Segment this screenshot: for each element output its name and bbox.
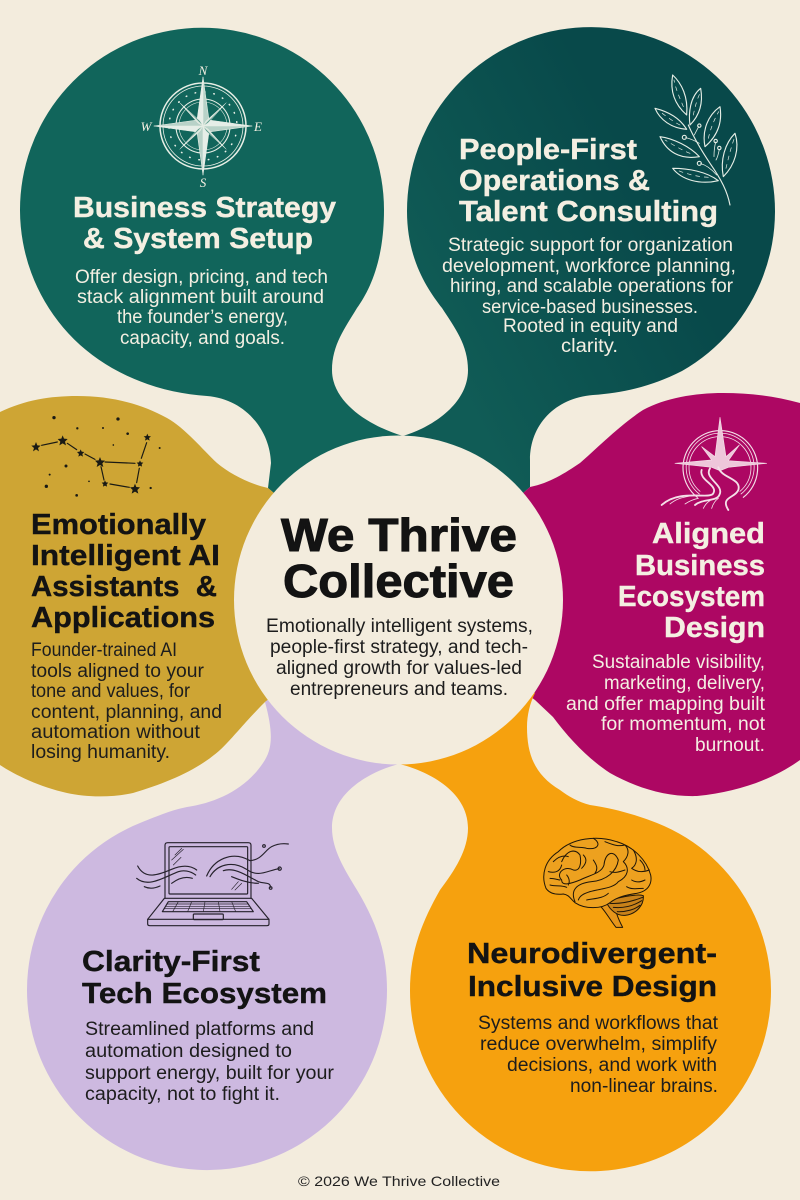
text block — [75, 267, 328, 349]
heading: Inclusive Design — [468, 971, 717, 1003]
heading — [459, 134, 718, 228]
text block: capacity, and goals. — [120, 328, 285, 349]
text block: hiring, and scalable operations for — [450, 276, 734, 297]
panel: center hub — [234, 436, 563, 764]
text block: service-based businesses. — [482, 297, 698, 318]
text block — [31, 640, 222, 763]
heading — [73, 192, 336, 255]
heading — [618, 518, 765, 644]
compass letters: E — [253, 119, 262, 134]
tagline: Emotionally intelligent systems, — [266, 616, 533, 637]
text block: content, planning, and — [31, 702, 222, 723]
heading: Operations & — [459, 165, 650, 197]
text block: Offer design, pricing, and tech — [75, 267, 328, 288]
compass letters: S — [200, 175, 207, 190]
title: We Thrive — [281, 509, 517, 561]
title: Collective — [283, 555, 514, 607]
text block — [85, 1019, 335, 1105]
tagline: aligned growth for values-led — [276, 658, 522, 679]
heading: Tech Ecosystem — [82, 978, 327, 1010]
dark teal blob — [400, 27, 775, 600]
heading — [31, 509, 220, 634]
gold blob — [0, 396, 400, 796]
compass letters: N — [198, 63, 209, 78]
icon: compass — [154, 77, 252, 175]
text block: tools aligned to your — [31, 661, 205, 682]
panel: aligned business ecosystem — [400, 393, 800, 796]
text block: Strategic support for organization — [448, 235, 733, 256]
heading: Neurodivergent- — [467, 938, 717, 970]
compass letters — [141, 63, 262, 190]
lilac blob — [27, 600, 400, 1170]
text block: Streamlined platforms and — [85, 1019, 314, 1040]
icon: laptop — [137, 843, 288, 926]
text block: for momentum, not — [601, 714, 766, 735]
tagline: entrepreneurs and teams. — [290, 679, 508, 700]
text block: clarity. — [561, 336, 618, 357]
text block: burnout. — [695, 735, 765, 756]
heading: Ecosystem — [618, 581, 765, 613]
teal blob — [20, 28, 403, 600]
text block: reduce overwhelm, simplify — [480, 1034, 718, 1055]
icon: constellation — [31, 416, 161, 497]
text block — [478, 1013, 719, 1097]
text block: automation designed to — [85, 1041, 292, 1062]
text block: and offer mapping built — [566, 694, 766, 715]
panel: emotionally intelligent AI — [0, 396, 400, 796]
heading: Design — [664, 612, 765, 644]
icon: compass and river — [662, 417, 767, 510]
text block: losing humanity. — [31, 742, 170, 763]
heading — [82, 946, 327, 1010]
heading: Business Strategy — [73, 192, 336, 224]
tagline — [266, 616, 533, 700]
title — [281, 509, 517, 607]
heading: Applications — [31, 602, 215, 634]
text block: non-linear brains. — [570, 1076, 718, 1097]
text block: stack alignment built around — [77, 287, 324, 308]
text block: the founder’s energy, — [117, 307, 288, 328]
text block: marketing, delivery, — [604, 673, 765, 694]
heading: Clarity-First — [82, 946, 260, 978]
footer: © 2026 We Thrive Collective — [298, 1173, 500, 1189]
text block: support energy, built for your — [85, 1063, 335, 1084]
text block: Systems and workflows that — [478, 1013, 719, 1034]
text block: Sustainable visibility, — [592, 652, 765, 673]
heading: Assistants & — [31, 571, 217, 603]
heading — [467, 938, 717, 1003]
heading: Emotionally — [31, 509, 206, 541]
icon: brain — [544, 838, 651, 927]
text block: tone and values, for — [31, 681, 191, 702]
icon: leaf sprig — [655, 75, 737, 205]
text block: development, workforce planning, — [442, 256, 736, 277]
panel: business strategy — [20, 28, 403, 600]
compass letters: W — [141, 119, 153, 134]
text block: Founder-trained AI — [31, 640, 177, 661]
heading: & System Setup — [83, 223, 313, 255]
text block — [442, 235, 736, 357]
panel: clarity-first tech — [27, 600, 400, 1170]
magenta blob — [400, 393, 800, 796]
heading: Talent Consulting — [459, 196, 718, 228]
heading: People-First — [459, 134, 637, 166]
heading: Intelligent AI — [31, 540, 220, 572]
text block: decisions, and work with — [507, 1055, 717, 1076]
text block: automation without — [31, 722, 201, 743]
panel: neurodivergent-inclusive — [399, 600, 771, 1171]
panel: people-first operations — [400, 27, 775, 600]
text block: Rooted in equity and — [503, 316, 678, 337]
heading: Business — [635, 550, 765, 582]
center circle — [234, 436, 563, 764]
tagline: people-first strategy, and tech- — [270, 637, 528, 658]
text block — [566, 652, 766, 756]
text block: capacity, not to fight it. — [85, 1084, 280, 1105]
orange blob — [399, 600, 771, 1171]
heading: Aligned — [652, 518, 765, 550]
